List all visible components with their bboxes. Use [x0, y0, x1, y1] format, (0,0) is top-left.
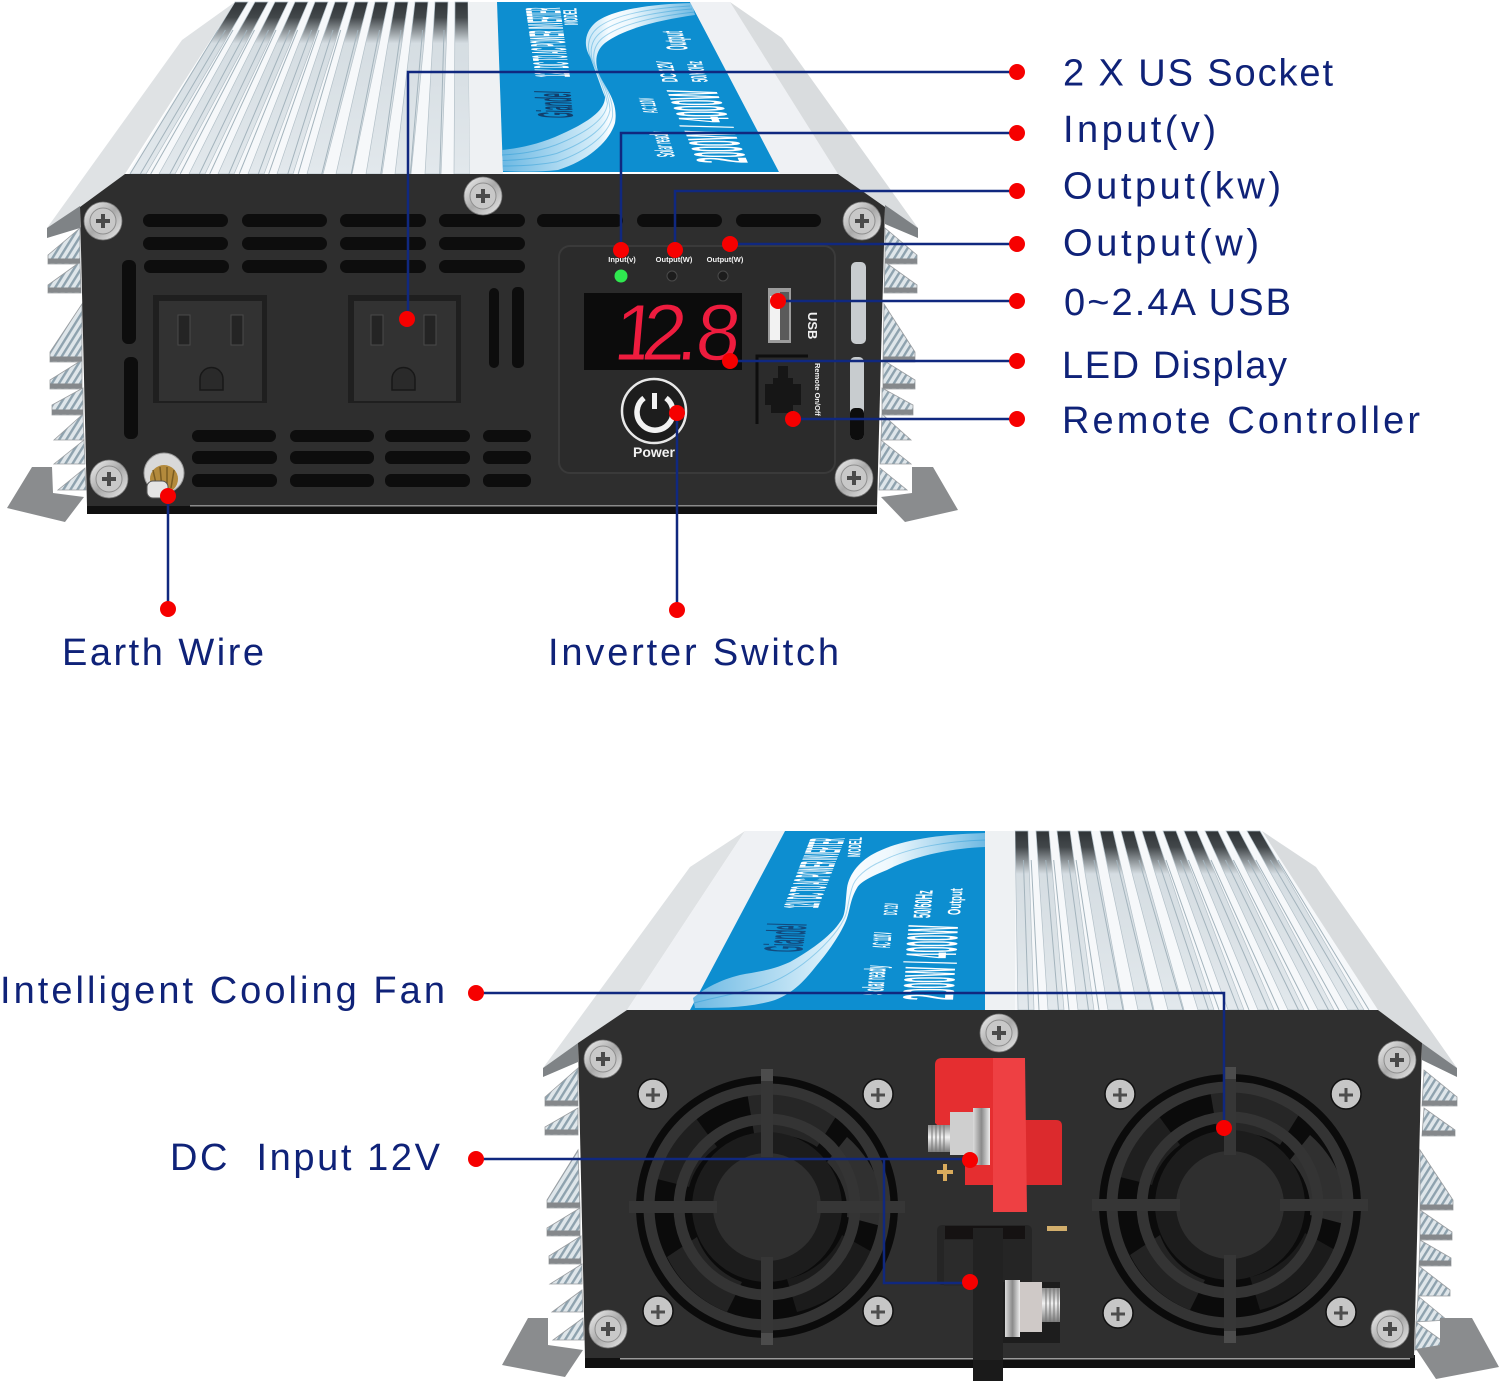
icon: rear screw top centre: [980, 1014, 1018, 1052]
icon: power button: [622, 379, 686, 443]
input label: Input(v): [608, 255, 636, 264]
label: Remote Controller: Remote Controller: [1062, 400, 1420, 442]
rear blue label: Solar ready: [857, 965, 893, 995]
LED off 1: [667, 271, 677, 281]
text: 2000W / 4000W: [889, 925, 974, 1000]
blue product label: AC 110V: [635, 98, 663, 113]
icon: screw bottom right: [835, 459, 873, 497]
label: DC Input 12V: DC Input 12V: [170, 1137, 441, 1179]
icon: screw top centre: [464, 177, 502, 215]
icon: fan screws: [638, 1079, 1361, 1328]
left side fins: [48, 228, 86, 490]
blue product label: Solar ready: [644, 131, 681, 157]
rear blue label: [690, 831, 985, 1010]
white strip: [468, 2, 503, 174]
icon: negative black terminal: [937, 1225, 1060, 1381]
right side fins: [879, 228, 917, 490]
rear blue label: Giandel: [754, 923, 820, 952]
output label 1: Output(W): [656, 255, 693, 264]
icon: AC socket 2: [348, 295, 461, 403]
rear blue label: AC 110V: [867, 932, 897, 948]
LED display: 12.8: [611, 287, 745, 377]
label: Earth Wire: Earth Wire: [62, 632, 264, 674]
rear right foot flap: [1416, 1318, 1499, 1379]
icon: positive red terminal: [928, 1058, 1062, 1212]
text: MODEL: [845, 837, 866, 857]
control panel: [559, 246, 835, 473]
USB port: [768, 288, 791, 343]
icon: plus sign: [937, 1164, 953, 1181]
text: 12V DC TO AC POWER INVERTER: [773, 838, 856, 908]
top heat sink fins: [124, 2, 470, 174]
callout dots: [160, 64, 1232, 1290]
label: Intelligent Cooling Fan: Intelligent Cooling Fan: [0, 970, 445, 1012]
panel: front view inverter: [7, 2, 958, 522]
output label 2: Output(W): [707, 255, 744, 264]
icon: AC socket 1: [153, 295, 267, 403]
label: Output(kw): Output(kw): [1063, 166, 1281, 208]
front black face plate: [80, 174, 885, 514]
label: Inverter Switch: Inverter Switch: [548, 632, 839, 674]
icon: rear screw top left: [584, 1040, 622, 1078]
rear wave swoosh: [693, 833, 985, 1008]
LED off 2: [718, 271, 728, 281]
rear left fins: [545, 1068, 584, 1340]
rear blue label: 50/60Hz: [908, 890, 938, 918]
rear left wing: [543, 831, 745, 1077]
icon: earth terminal: [144, 453, 184, 498]
remote label: Remote On/Off: [813, 363, 822, 416]
icon: rear screw top right: [1378, 1041, 1416, 1079]
power label: Power: [633, 444, 676, 460]
panel: rear view inverter: [502, 831, 1499, 1381]
icon: screw top right: [843, 202, 881, 240]
icon: cooling fan right: [1092, 1067, 1368, 1343]
left foot flap: [7, 467, 84, 522]
right side silver slots: [850, 262, 866, 440]
remote port: [757, 356, 808, 424]
rear heat sink fins: [1015, 831, 1378, 1010]
right side wing: [730, 2, 918, 238]
icon: cooling fan left: [629, 1069, 905, 1345]
right foot flap: [881, 467, 958, 522]
lower ventilation slots: [192, 430, 531, 487]
rear blue label: DC 12V: [880, 903, 903, 915]
label: USB: 0~2.4A USB: [1064, 282, 1291, 324]
rear white strip right: [985, 831, 1015, 1010]
icon: screw bottom left: [90, 460, 128, 498]
right white strip: [690, 2, 838, 174]
rear black face plate: [578, 1010, 1422, 1368]
label: Input(v): Input(v): [1063, 109, 1216, 151]
icon: rear screw bottom left: [589, 1310, 627, 1348]
left side wing: [47, 2, 235, 238]
label: LED Display: LED Display: [1062, 345, 1287, 387]
label: 2 X US Socket: 2 X US Socket: [1063, 52, 1333, 94]
icon: minus sign: [1047, 1226, 1067, 1231]
USB label: USB: [805, 312, 820, 339]
top ventilation slots: [122, 214, 821, 439]
rear right wing: [1262, 831, 1457, 1077]
rear right fins: [1415, 1070, 1457, 1350]
green LED: [614, 270, 628, 282]
rear left foot flap: [502, 1318, 583, 1377]
label: Output(w): Output(w): [1063, 222, 1259, 264]
icon: screw top left: [84, 202, 122, 240]
wave swoosh: [502, 3, 695, 172]
rear left white strip: [627, 831, 785, 1010]
icon: rear screw bottom right: [1371, 1310, 1409, 1348]
callout lines: [168, 72, 1224, 1283]
rear blue label: Output: [945, 888, 967, 915]
